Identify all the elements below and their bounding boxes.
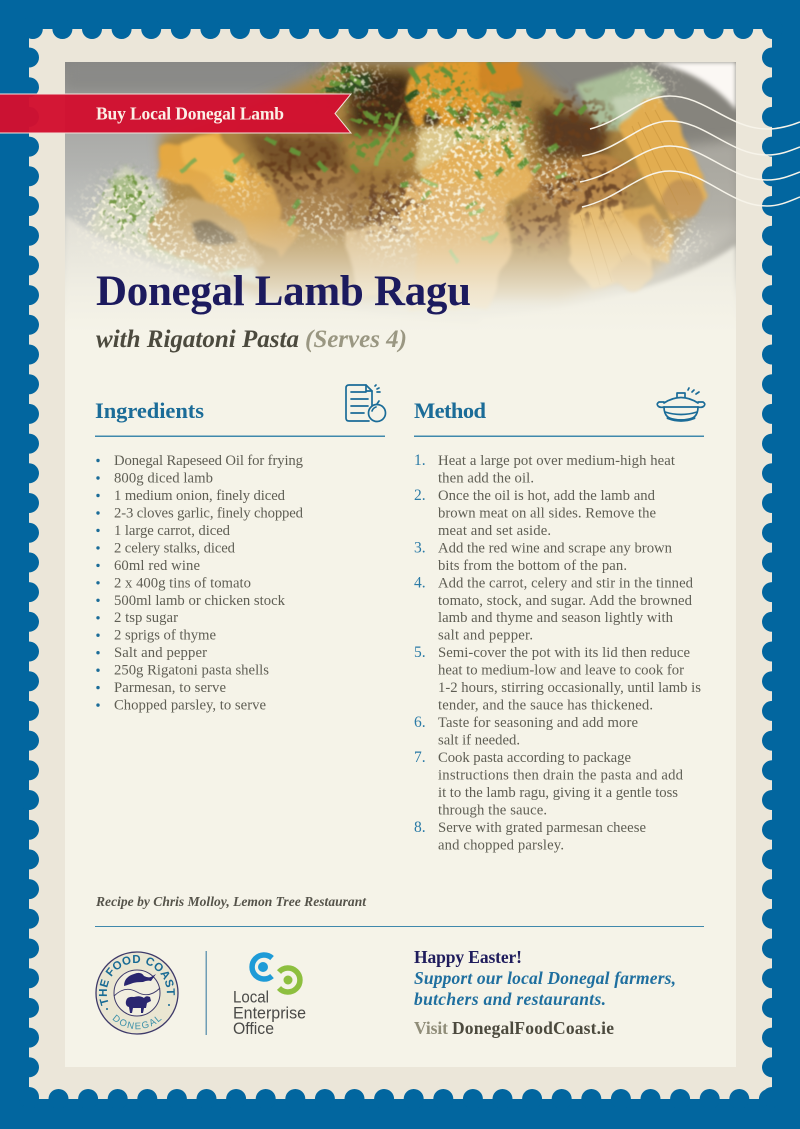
step numbers: 3. (414, 539, 426, 556)
logo: Local Enterprise Office: Office (233, 1020, 274, 1038)
ingredient lines: 2 x 400g tins of tomato (114, 575, 251, 591)
ingredient lines: 2 tsp sugar (114, 610, 178, 626)
pale herbs and leaves (90, 66, 665, 285)
footer divider (95, 926, 704, 927)
step text: through the sauce. (438, 802, 547, 818)
step text: Once the oil is hot, add the lamb and (438, 488, 656, 504)
tube ridges (580, 110, 697, 266)
step text: Taste for seasoning and add more (438, 715, 638, 731)
step numbers: 7. (414, 749, 426, 766)
step numbers: 1. (414, 452, 426, 469)
ribbon banner (0, 94, 351, 133)
ingredient lines: Chopped parsley, to serve (114, 698, 266, 714)
logo: The Food Coast Donegal (95, 951, 179, 1035)
heading: ingredients: Ingredients (95, 398, 204, 423)
step text: brown meat on all sides. Remove the (438, 505, 656, 521)
ribbon label: Buy Local Donegal Lamb (96, 104, 284, 124)
footer message (414, 947, 676, 1038)
photo fade into cream (65, 182, 736, 332)
logo: Local Enterprise Office: Enterprise (233, 1004, 306, 1022)
panel: cream stamp interior (65, 62, 736, 1067)
ingredient lines: Donegal Rapeseed Oil for frying (114, 453, 304, 469)
step numbers: 6. (414, 714, 426, 731)
step text: it to the lamb ragu, giving it a gentle toss (438, 785, 678, 801)
chopped chives (180, 62, 586, 262)
method steps (414, 452, 701, 853)
logo: Local Enterprise Office: Local (233, 988, 269, 1006)
step text: lamb and thyme and season lightly with (438, 610, 674, 626)
step text: heat to medium-low and leave to cook for (438, 663, 684, 679)
step numbers (414, 452, 426, 836)
postmark wavy lines (580, 96, 800, 207)
step text: Add the carrot, celery and stir in the tinned (438, 575, 694, 591)
step text: salt and pepper. (438, 628, 533, 644)
step text: bits from the bottom of the pan. (438, 558, 627, 574)
footer message: Support our local Donegal farmers, (414, 968, 676, 988)
ingredient lines: 1 medium onion, finely diced (114, 488, 286, 504)
footer message: Visit (414, 1018, 448, 1038)
step text: then add the oil. (438, 470, 534, 486)
sheep (126, 996, 151, 1013)
ingredients list (96, 453, 304, 714)
step numbers: 5. (414, 644, 426, 661)
step text: Serve with grated parmesan cheese (438, 820, 646, 836)
step text: Semi-cover the pot with its lid then reduce (438, 645, 690, 661)
ingredient lines: 500ml lamb or chicken stock (114, 593, 286, 609)
ingredient lines: 2 celery stalks, diced (114, 540, 236, 556)
fish (124, 973, 156, 986)
ingredient lines: 250g Rigatoni pasta shells (114, 663, 269, 679)
title: Donegal Lamb Ragu (96, 268, 471, 315)
rigatoni tubes (150, 62, 708, 310)
subtitle: (Serves 4) (305, 326, 407, 353)
footer message: DonegalFoodCoast.ie (452, 1018, 614, 1038)
logo divider (206, 951, 207, 1035)
logo: The Food Coast Donegal: DONEGAL (112, 1014, 162, 1030)
ingredient lines: 1 large carrot, diced (114, 523, 231, 539)
step text: and chopped parsley. (438, 837, 564, 853)
step text (438, 453, 701, 853)
step text: tender, and the sauce has thickened. (438, 698, 653, 714)
ingredient lines: Salt and pepper (114, 645, 207, 661)
pasta and sauce mass (160, 62, 700, 300)
step text: Heat a large pot over medium-high heat (438, 453, 675, 469)
step text: Add the red wine and scrape any brown (438, 540, 673, 556)
plate background (65, 62, 736, 296)
ingredient lines (114, 453, 304, 714)
step text: 1-2 hours, stirring occasionally, until lamb is (438, 680, 701, 696)
icon: recipe page and apple (346, 385, 386, 422)
ingredient lines: 800g diced lamb (114, 470, 213, 486)
step text: Cook pasta according to package (438, 750, 631, 766)
ingredient lines: Parmesan, to serve (114, 680, 226, 696)
ingredient lines: 2-3 cloves garlic, finely chopped (114, 505, 304, 521)
step numbers: 8. (414, 819, 426, 836)
subtitle: with Rigatoni Pasta (96, 326, 299, 353)
ingredient lines: 2 sprigs of thyme (114, 628, 216, 644)
subtitle (96, 326, 407, 353)
step text: tomato, stock, and sugar. Add the browned (438, 593, 693, 609)
ingredient lines: 60ml red wine (114, 558, 200, 574)
heading: method: Method (414, 398, 486, 423)
logo: The Food Coast Donegal: THE FOOD COAST (98, 955, 175, 1006)
grated parmesan (82, 62, 702, 276)
footer message: Happy Easter! (414, 947, 522, 967)
recipe credit: Recipe by Chris Molloy, Lemon Tree Restaurant (95, 894, 367, 909)
photo: rigatoni pasta on a plate (65, 62, 736, 312)
footer message: butchers and restaurants. (414, 989, 606, 1009)
bullets (96, 459, 100, 707)
step text: meat and set aside. (438, 523, 551, 539)
meat crumbles (255, 85, 630, 245)
step text: salt if needed. (438, 732, 520, 748)
icon: cooking pot (657, 388, 705, 420)
step text: instructions then drain the pasta and add (438, 767, 684, 783)
step numbers: 4. (414, 574, 426, 591)
green flecks (102, 66, 535, 237)
step numbers: 2. (414, 487, 426, 504)
logo: Local Enterprise Office (233, 955, 306, 1038)
